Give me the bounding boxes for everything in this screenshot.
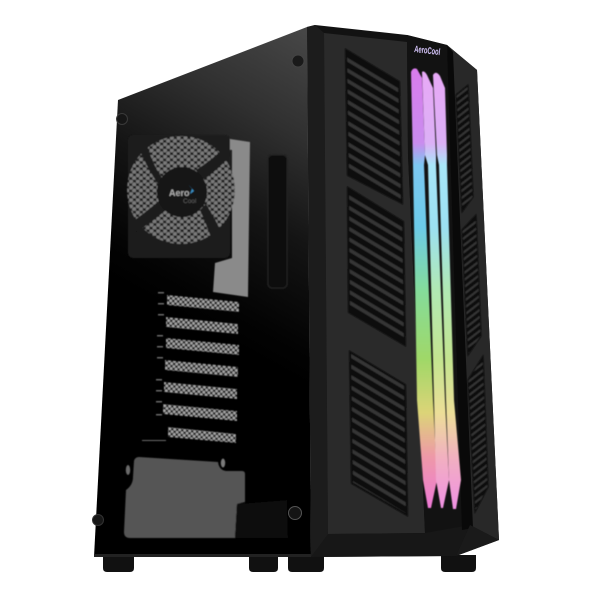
bottom glass lip [94,554,311,557]
slot bracket ticks [142,292,166,441]
PSU opening [124,457,245,538]
screws [92,55,304,526]
AeroCool front logo: AeroCool [414,44,441,58]
main front face [324,33,425,534]
fan: Cool [183,198,197,205]
front panel [307,25,499,557]
fan logo: Aero [169,188,190,198]
rear grey strip [213,137,250,297]
chassis interior [124,135,288,538]
cable cutout [268,155,287,288]
PCI slot mesh [163,295,239,443]
fan [127,135,235,258]
left vents [346,50,407,515]
PSU bracket box [235,500,288,538]
LED housing [407,35,462,533]
corner frame [307,25,328,557]
right face [447,45,499,540]
right vents [456,85,488,512]
side glass panel [94,27,311,557]
feet [103,555,476,572]
lower lip [311,525,470,557]
RGB LED light bars [411,68,461,509]
